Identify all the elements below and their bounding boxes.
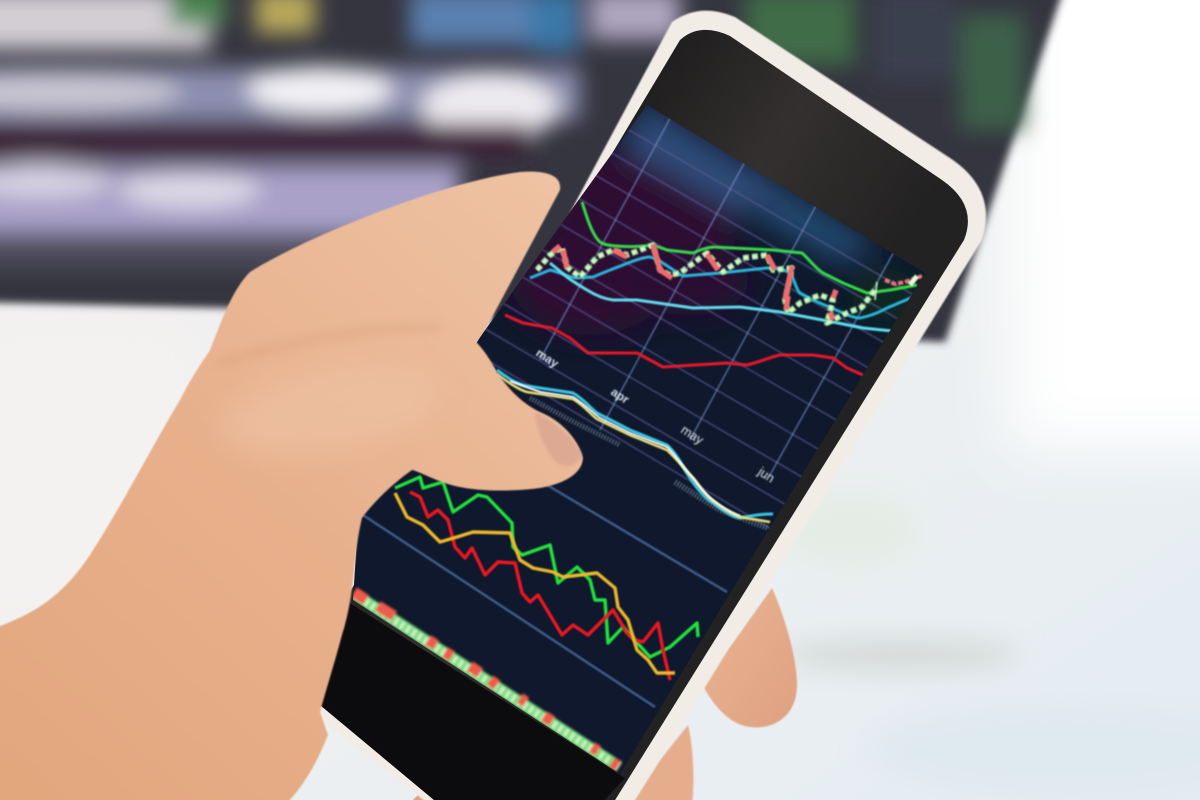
volume bars [354, 592, 619, 767]
indicator: lower panel yellow curve [497, 374, 770, 522]
indicator: red line [505, 315, 863, 375]
indicator: lower panel cyan curve [497, 370, 773, 518]
phone screen chart [353, 105, 925, 774]
index finger behind the phone edge [210, 172, 560, 420]
finger: little finger at the bottom [630, 725, 693, 800]
finger: ring finger on the right [700, 588, 797, 727]
line chart: yellow series [395, 493, 675, 673]
chart grid lines [362, 118, 913, 708]
fingers behind the phone [408, 588, 797, 800]
phone white body [305, 11, 986, 800]
hand and thumb in the foreground [0, 320, 583, 800]
blurred monitor in the background [0, 0, 1070, 342]
axis label: may: may [533, 346, 561, 371]
black lower bezel [320, 600, 625, 800]
crease between finger and thumb [215, 328, 440, 365]
palm and thumb [0, 320, 583, 800]
indicator: lower panel ticks right [675, 482, 768, 528]
phone black front [320, 30, 968, 800]
indicator: lower panel ticks [530, 398, 620, 445]
indicator: green band [582, 202, 917, 293]
thumb highlight [215, 352, 445, 468]
indicator: lower cyan band [550, 263, 892, 331]
line chart: green series [395, 477, 698, 657]
candlesticks [537, 244, 922, 323]
axis label: apr: apr [608, 385, 632, 407]
finger: tip under the phone [408, 795, 445, 800]
axis label: may: may [678, 423, 706, 448]
axis label: jun: jun [755, 464, 777, 486]
line chart: red series [410, 492, 670, 680]
indicator: upper blue band [530, 257, 913, 318]
indicator: lower panel white curve [510, 381, 740, 516]
chart background [340, 100, 940, 780]
smartphone [305, 11, 1000, 800]
thumbnail [535, 412, 582, 466]
